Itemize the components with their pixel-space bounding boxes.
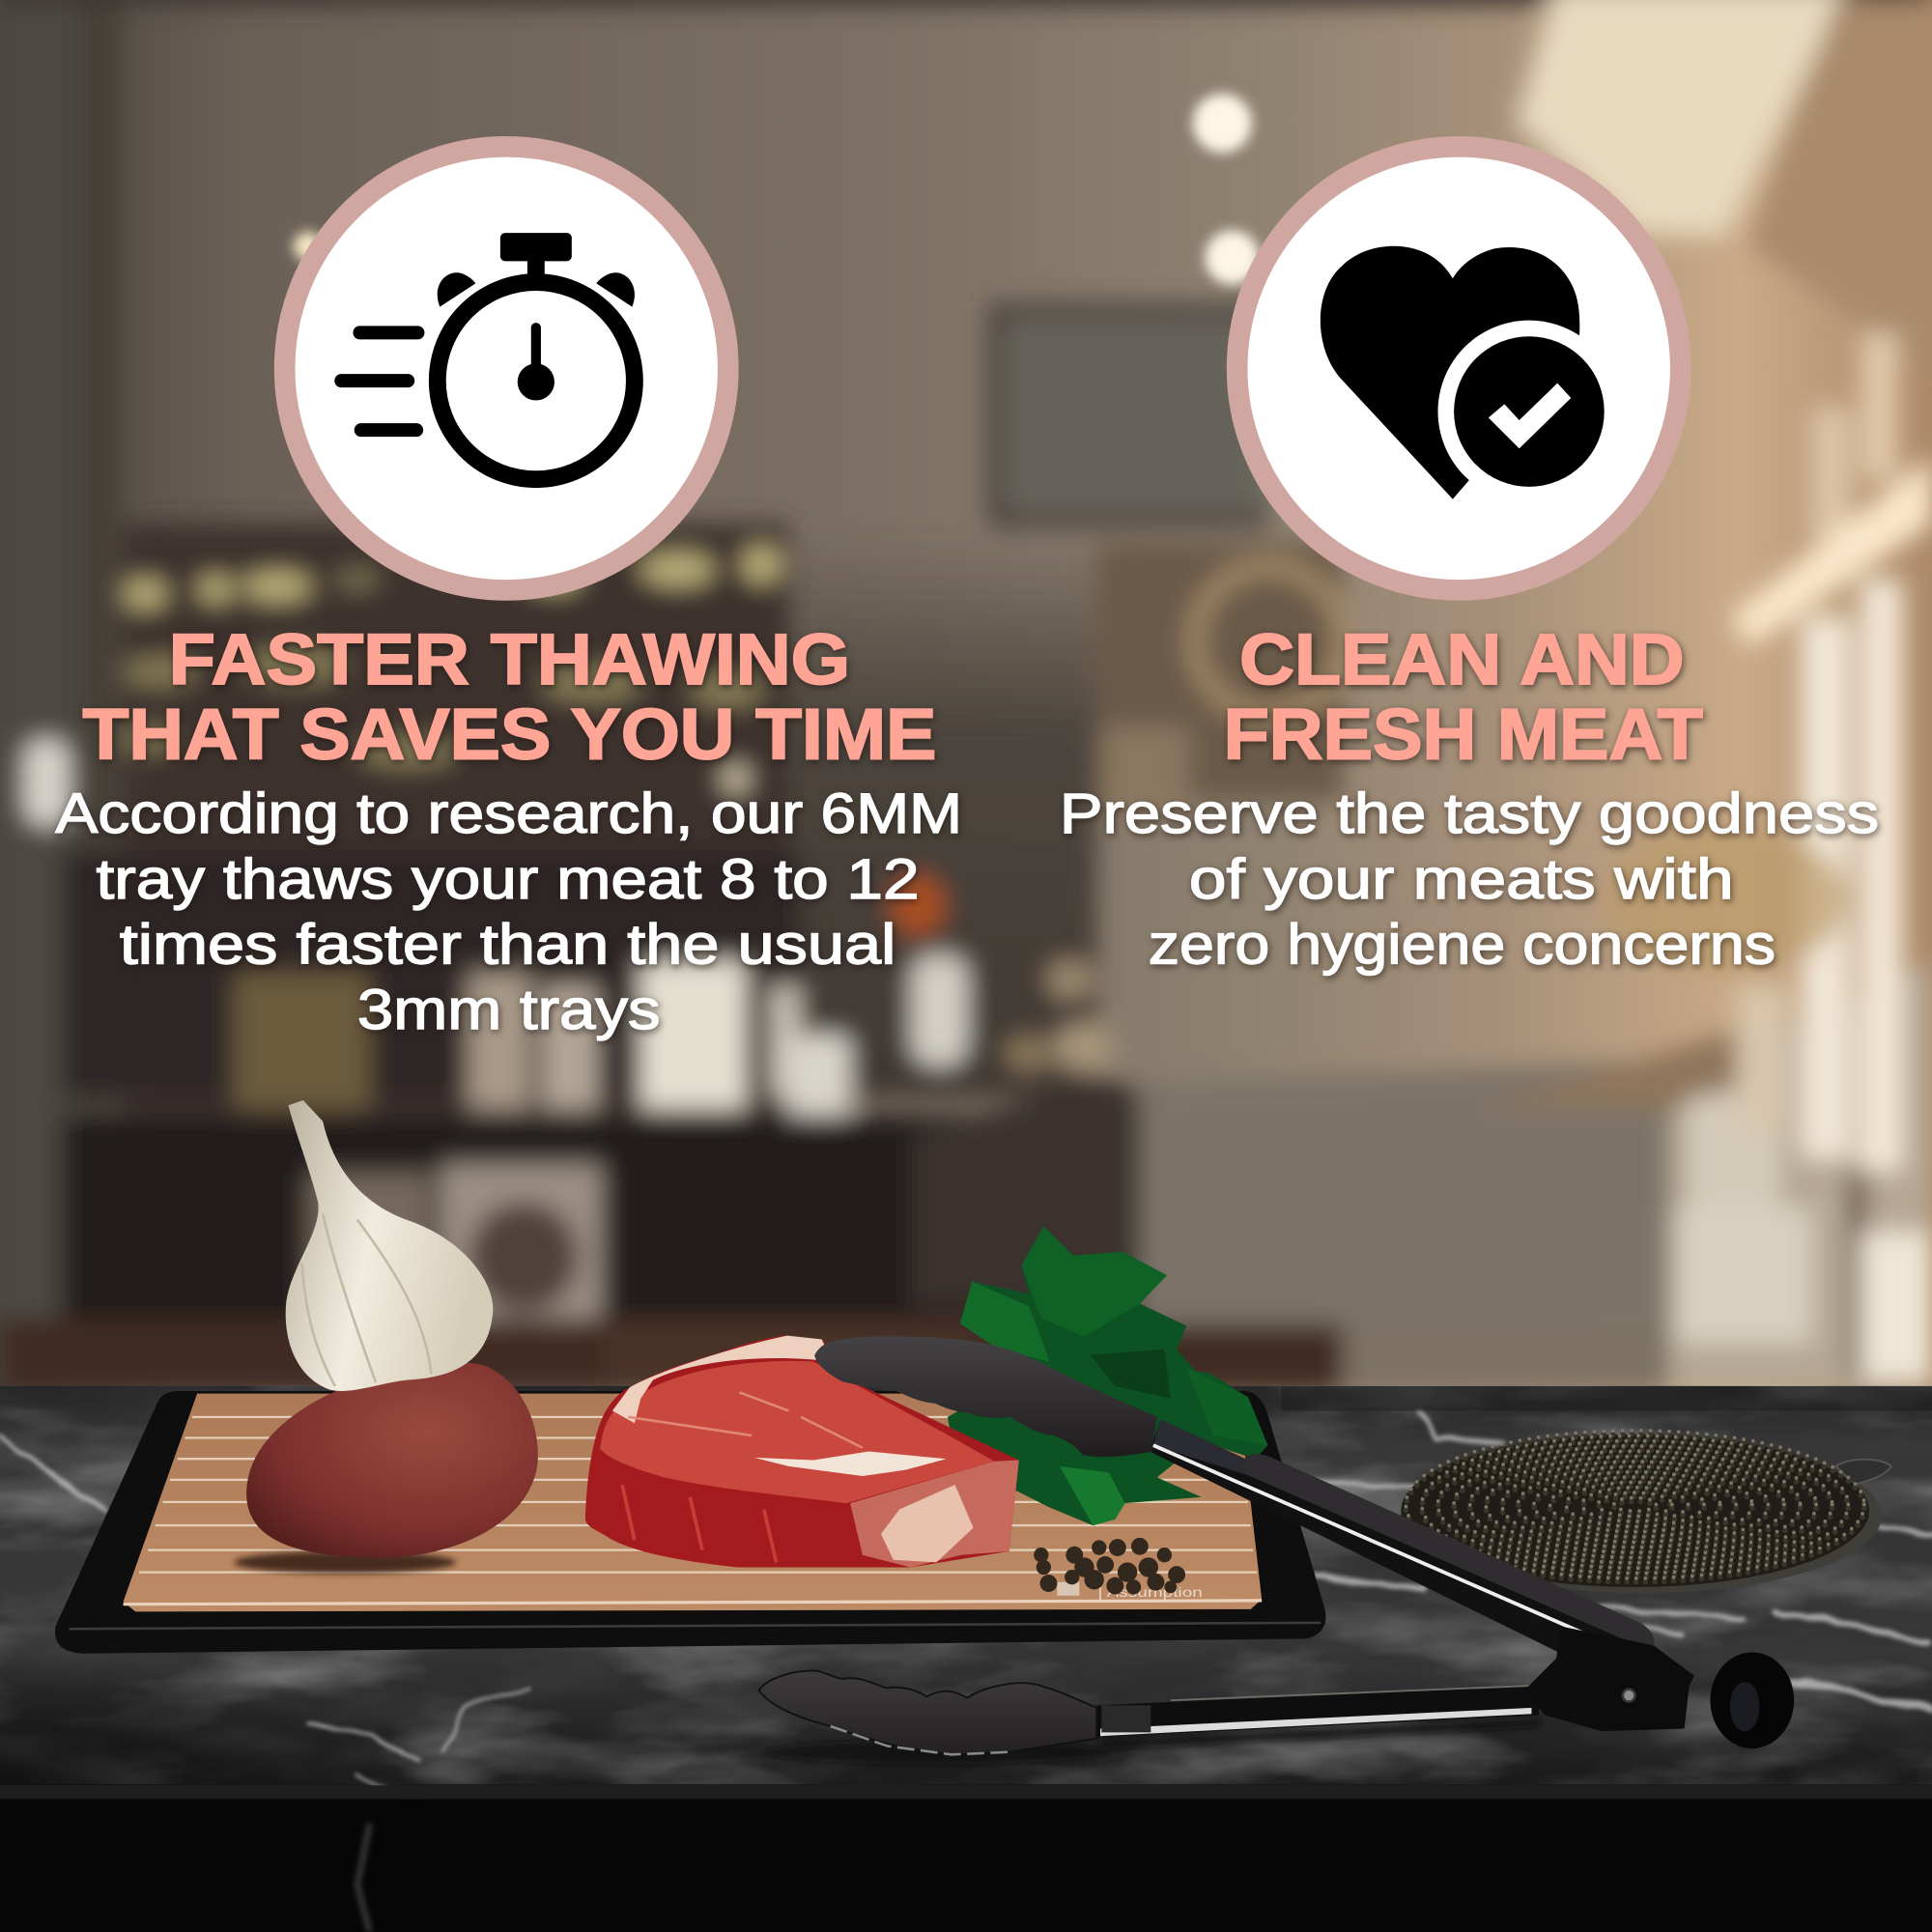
body text: clean and fresh meat (1060, 782, 1879, 976)
body text: faster thawing: times faster than the usual (120, 913, 895, 976)
heading: faster thawing (82, 619, 936, 775)
left icon badge: stopwatch (285, 147, 728, 590)
body text: clean and fresh meat: of your meats with (1189, 848, 1734, 911)
silicone scrubber (1401, 1431, 1891, 1593)
potato (246, 1363, 538, 1558)
peppercorns (1034, 1538, 1185, 1595)
body text: faster thawing: tray thaws your meat 8 to 12 (96, 848, 920, 911)
marble table top (0, 1386, 1932, 1811)
right icon badge: heart with check (1237, 147, 1681, 590)
upper tong arm (1150, 1419, 1694, 1686)
raw steak (585, 1336, 1019, 1567)
body text: clean and fresh meat: Preserve the tasty goodness (1060, 782, 1879, 845)
heading: clean and fresh meat: CLEAN AND (1239, 619, 1685, 699)
parsley (948, 1226, 1267, 1525)
body text: faster thawing: According to research, our 6MM (55, 782, 962, 845)
thawing tray (55, 1391, 1325, 1654)
heading: faster thawing: FASTER THAWING (169, 619, 850, 699)
heading: clean and fresh meat: FRESH MEAT (1224, 695, 1703, 775)
lower tong (759, 1670, 1540, 1765)
blurred restaurant background (0, 0, 1932, 1392)
thawing tray: | Assumption (1097, 1584, 1203, 1600)
heading: faster thawing: THAT SAVES YOU TIME (82, 695, 936, 775)
body text: faster thawing (55, 782, 962, 1041)
icon: heart and check mark (1321, 246, 1620, 502)
body text: faster thawing: 3mm trays (357, 979, 661, 1041)
icon: stopwatch with speed lines (341, 233, 635, 479)
garlic bulb (286, 1100, 493, 1391)
table front edge (0, 1785, 1932, 1932)
upper tong head (814, 1336, 1157, 1457)
tong hinge and pull ring (1524, 1627, 1794, 1748)
heading: clean and fresh meat (1224, 619, 1703, 775)
body text: clean and fresh meat: zero hygiene concerns (1149, 913, 1776, 976)
